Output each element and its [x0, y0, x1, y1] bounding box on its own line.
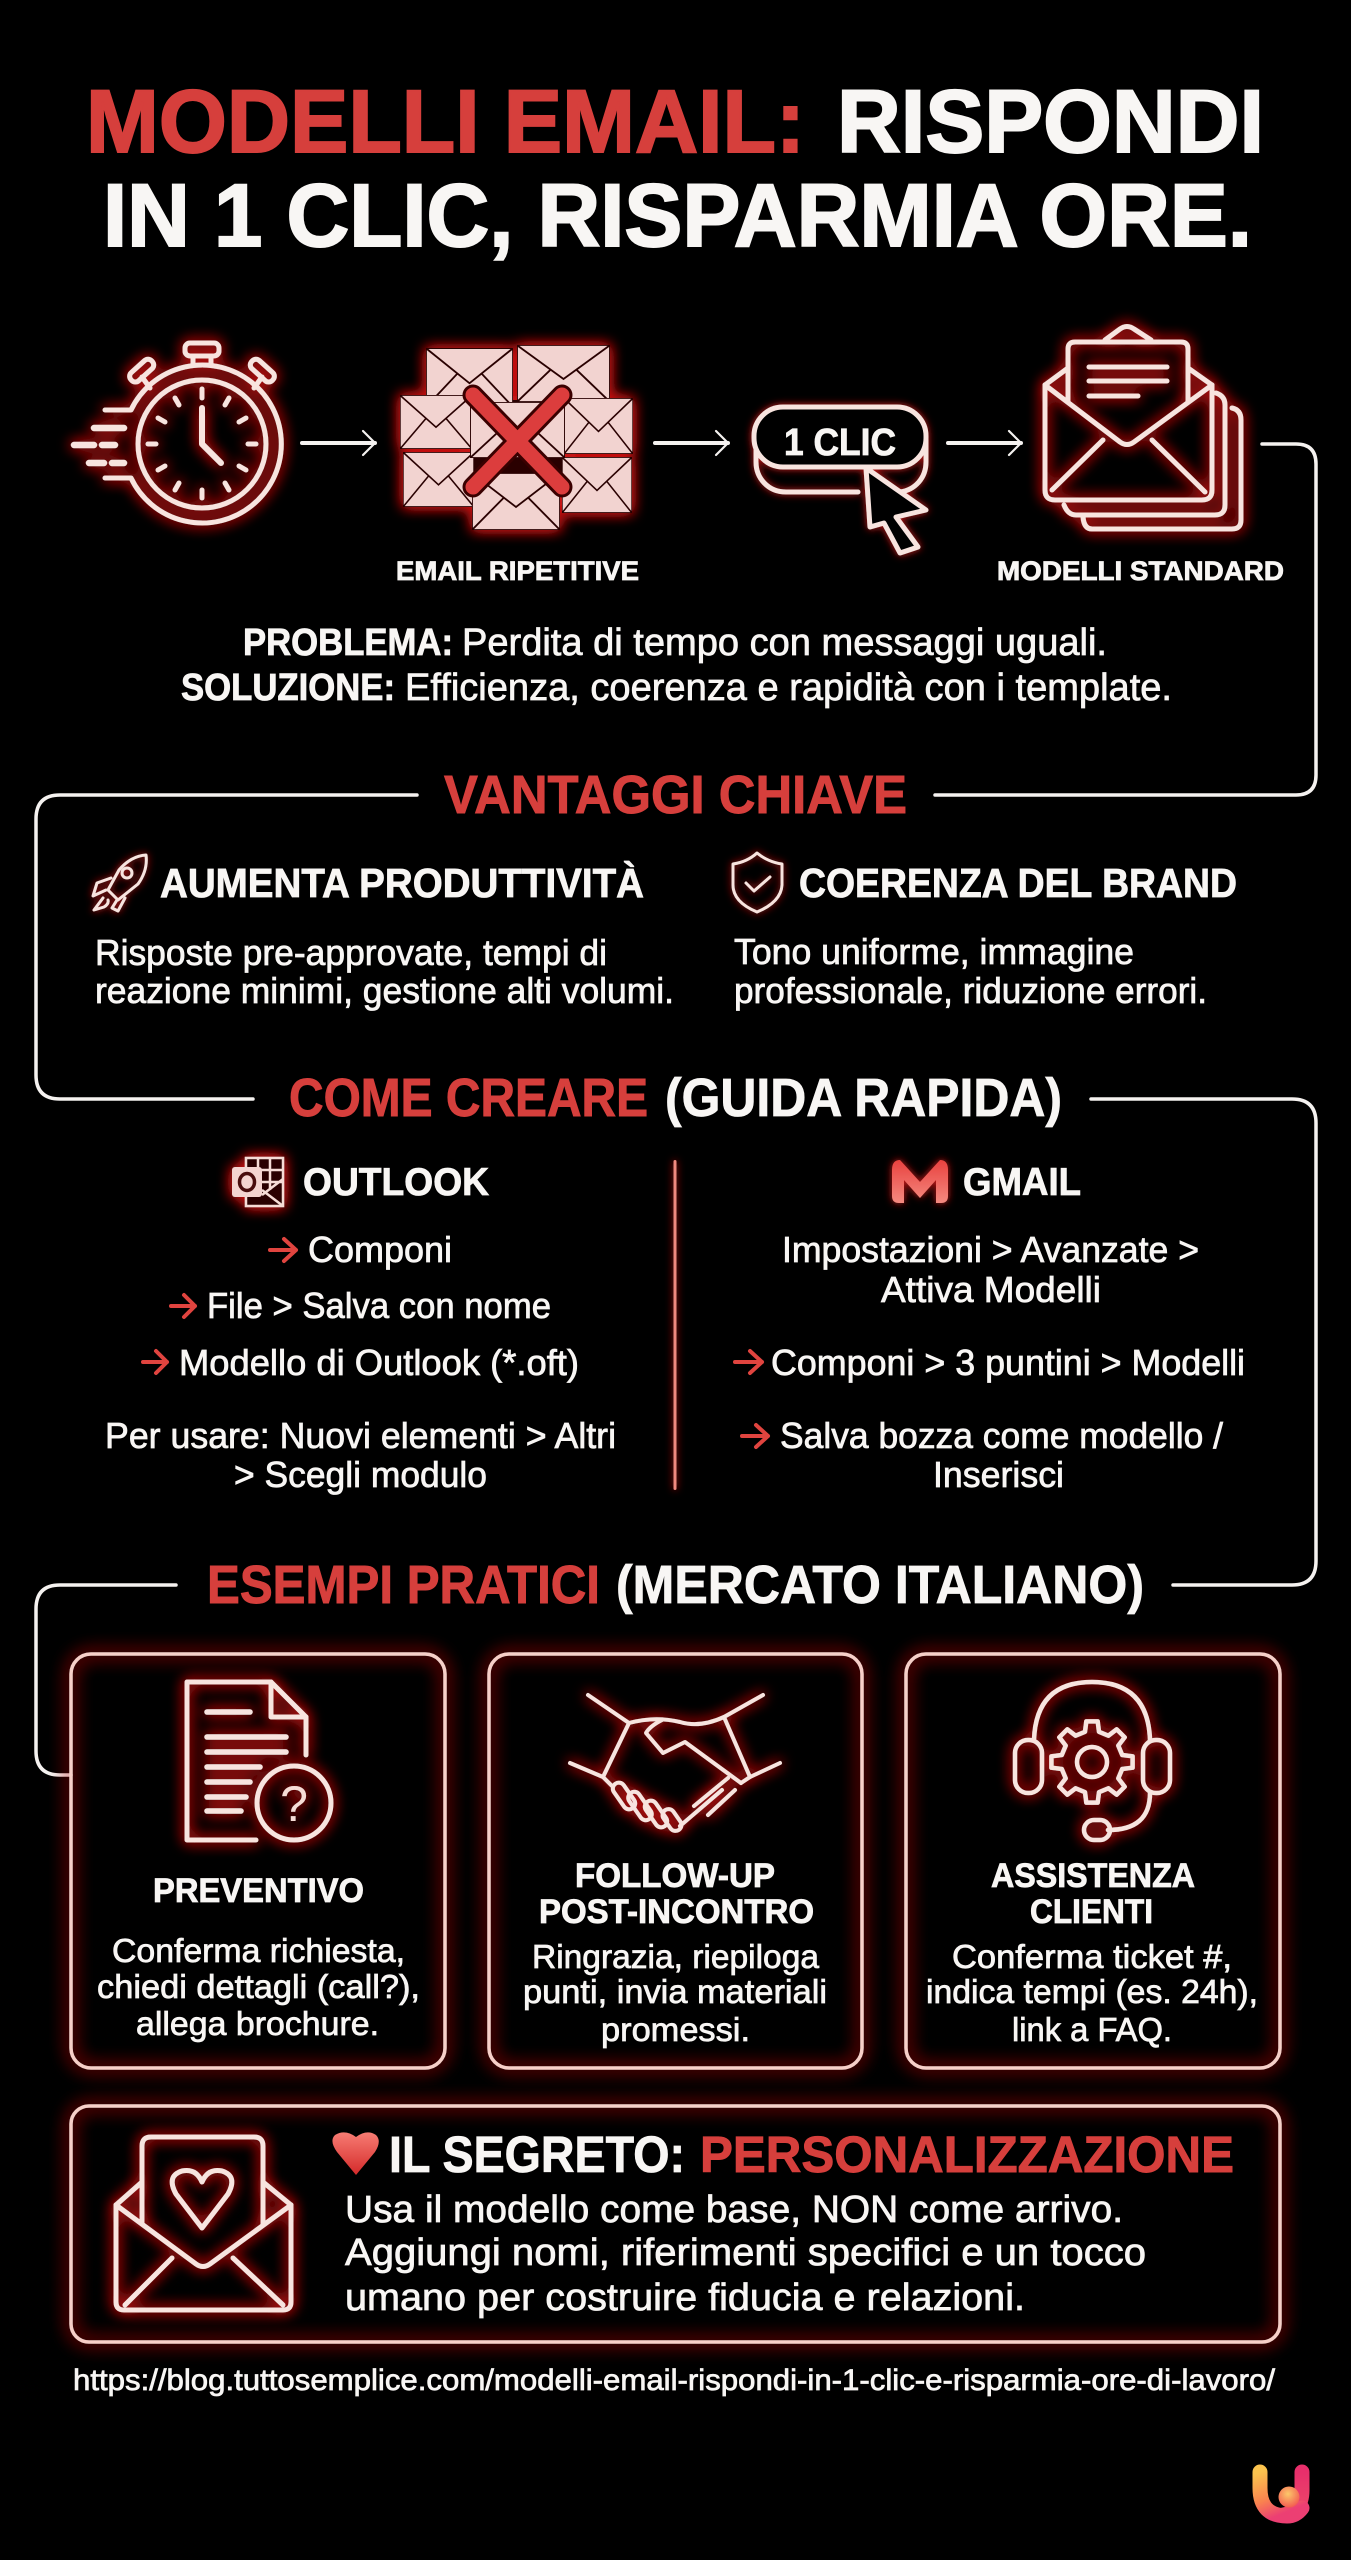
heading: follow-up: POST-INCONTRO: [539, 1893, 814, 1931]
icon: rocket: [93, 855, 146, 911]
title: IN 1 CLIC, RISPARMIA ORE.: [103, 165, 1252, 265]
icon: document with question mark: ?: [280, 1776, 308, 1832]
panel: productivity benefit: [93, 855, 674, 1011]
description: quote: chiedi dettagli (call?),: [97, 1968, 420, 2005]
icon: standard template envelope stack: [1045, 326, 1241, 529]
description: productivity: [95, 932, 674, 1011]
label: repetitive emails: EMAIL RIPETITIVE: [396, 556, 639, 586]
arrow: to repetitive emails: [302, 431, 375, 455]
heading: practical examples: (MERCATO ITALIANO): [616, 1555, 1144, 1615]
panel: the secret callout: [71, 2106, 1280, 2342]
description: follow-up: [523, 1938, 827, 2048]
steps: gmail: Salva bozza come modello /: [780, 1415, 1223, 1456]
title: MODELLI EMAIL:: [86, 71, 805, 171]
heading: follow-up: [539, 1857, 814, 1931]
description: the secret: [345, 2189, 1146, 2319]
icon: handshake: [570, 1695, 780, 1833]
heading: customer support: CLIENTI: [1030, 1893, 1153, 1931]
heading: how to create: COME CREARE: [289, 1068, 648, 1128]
heading: key benefits: VANTAGGI CHIAVE: [444, 765, 907, 825]
connector: benefits left to guide: [36, 795, 417, 1099]
icon: red heart: [332, 2132, 379, 2175]
icon: envelope with heart: [116, 2137, 291, 2310]
heading: the secret: [389, 2126, 1234, 2183]
arrow: to one click: [655, 431, 728, 455]
panel: gmail guide: [735, 1160, 1245, 1495]
description: customer support: Conferma ticket #,: [952, 1938, 1232, 1975]
description: the secret: umano per costruire fiducia e relazioni.: [345, 2277, 1025, 2319]
steps: outlook: Componi: [308, 1229, 452, 1270]
steps: gmail: Attiva Modelli: [881, 1269, 1101, 1310]
label: standard templates: MODELLI STANDARD: [997, 556, 1284, 586]
steps: gmail: Inserisci: [933, 1454, 1064, 1495]
icon: one click button: [754, 407, 926, 553]
description: the secret: Usa il modello come base, NON come arrivo.: [345, 2189, 1123, 2231]
icon: gmail: [892, 1160, 948, 1203]
steps: outlook: > Scegli modulo: [234, 1454, 487, 1495]
connector: top right to benefits: [935, 444, 1316, 795]
title: RISPONDI: [837, 71, 1264, 171]
problem and solution text: [181, 622, 1172, 709]
heading: practical examples: [207, 1555, 1144, 1615]
heading: follow-up: FOLLOW-UP: [575, 1857, 775, 1895]
divider between outlook and gmail: [674, 1160, 676, 1490]
heading: customer support: [991, 1857, 1195, 1931]
problem and solution text: SOLUZIONE:: [181, 667, 395, 709]
problem and solution text: Perdita di tempo con messaggi uguali.: [462, 622, 1107, 664]
steps: outlook: Per usare: Nuovi elementi > Altri: [105, 1415, 616, 1456]
description: productivity: Risposte pre-approvate, tempi di: [95, 932, 607, 973]
panel: follow-up card: [489, 1654, 862, 2068]
description: quote: Conferma richiesta,: [112, 1932, 405, 1969]
description: quote: allega brochure.: [136, 2005, 379, 2042]
description: follow-up: promessi.: [601, 2011, 750, 2048]
icon: headset with gear: [1015, 1682, 1170, 1840]
steps: outlook: File > Salva con nome: [207, 1285, 551, 1326]
icon: logo: [1260, 2472, 1302, 2516]
description: quote: [97, 1932, 420, 2042]
panel: quote card: [71, 1654, 445, 2068]
heading: the secret: IL SEGRETO:: [389, 2126, 685, 2183]
heading: outlook: OUTLOOK: [303, 1161, 489, 1204]
problem and solution text: PROBLEMA:: [243, 622, 453, 664]
heading: quote: PREVENTIVO: [153, 1872, 364, 1910]
heading: increase productivity: AUMENTA PRODUTTIVITÀ: [160, 860, 644, 906]
description: brand consistency: [734, 931, 1207, 1011]
description: follow-up: punti, invia materiali: [523, 1973, 827, 2010]
icon: shield: [733, 853, 782, 912]
panel: outlook guide: [105, 1158, 616, 1495]
heading: customer support: ASSISTENZA: [991, 1857, 1195, 1895]
panel: customer support card: [906, 1654, 1280, 2068]
description: customer support: indica tempi (es. 24h),: [926, 1973, 1258, 2010]
heading: practical examples: ESEMPI PRATICI: [207, 1555, 600, 1615]
arrow: to standard templates: [948, 431, 1021, 455]
description: customer support: [926, 1938, 1258, 2048]
description: brand consistency: professionale, riduzione errori.: [734, 970, 1207, 1011]
title: [86, 71, 1264, 265]
heading: how to create: (GUIDA RAPIDA): [665, 1068, 1062, 1128]
steps: outlook: Modello di Outlook (*.oft): [179, 1342, 579, 1383]
problem and solution text: Efficienza, coerenza e rapidità con i template.: [405, 667, 1172, 709]
heading: how to create: [289, 1068, 1062, 1128]
icon: one click button: 1 CLIC: [784, 422, 896, 464]
steps: gmail: [735, 1229, 1245, 1495]
description: brand consistency: Tono uniforme, immagine: [734, 931, 1134, 972]
description: follow-up: Ringrazia, riepiloga: [532, 1938, 820, 1975]
description: productivity: reazione minimi, gestione alti volumi.: [95, 970, 674, 1011]
icon: repetitive emails with red cross: [400, 345, 633, 530]
icon: stopwatch: [74, 343, 281, 523]
description: customer support: link a FAQ.: [1012, 2011, 1172, 2048]
icon: outlook: [232, 1158, 283, 1206]
panel: brand consistency benefit: [733, 853, 1237, 1011]
connector: guide right to examples: [1091, 1099, 1316, 1585]
connector: examples left to first card: [36, 1585, 176, 1775]
icon: document with question mark: [187, 1682, 331, 1840]
steps: gmail: Impostazioni > Avanzate >: [782, 1229, 1199, 1270]
heading: the secret: PERSONALIZZAZIONE: [700, 2126, 1234, 2183]
description: the secret: Aggiungi nomi, riferimenti specifici e un tocco: [345, 2232, 1146, 2274]
heading: brand consistency: COERENZA DEL BRAND: [799, 860, 1237, 906]
heading: gmail: GMAIL: [963, 1161, 1081, 1204]
steps: outlook: [105, 1229, 616, 1495]
source url: https://blog.tuttosemplice.com/modelli-email-rispondi-in-1-clic-e-risparmia-ore-di-lavoro/: [73, 2364, 1276, 2397]
steps: gmail: Componi > 3 puntini > Modelli: [771, 1342, 1245, 1383]
